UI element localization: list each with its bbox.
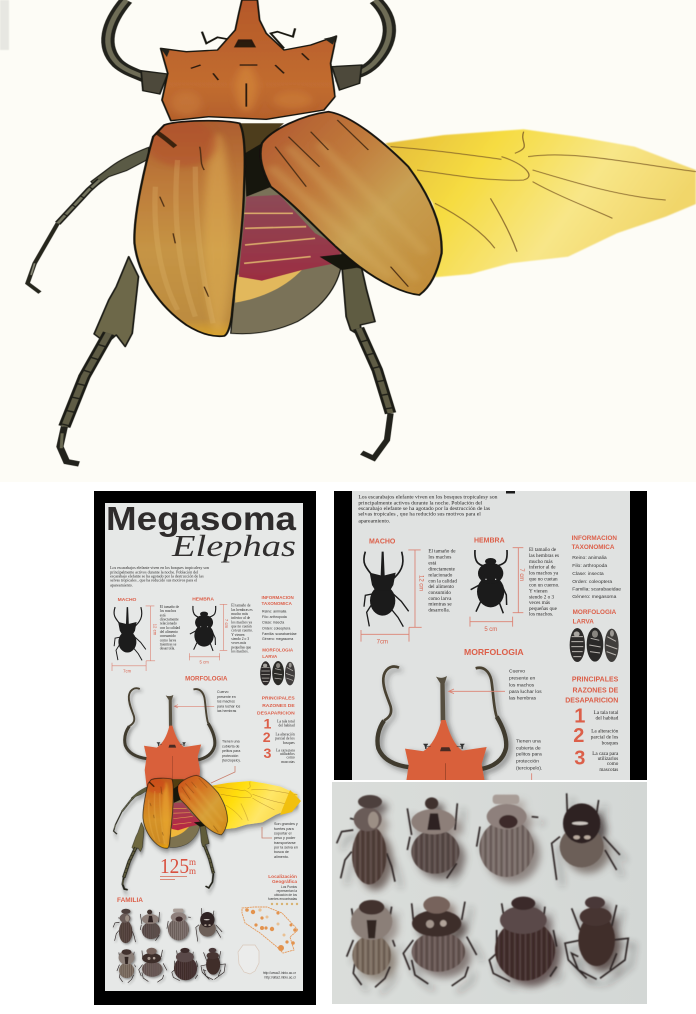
male section: como larva [160,638,177,642]
male section: del alimento [428,584,454,590]
larva morphology: LARVA [573,618,594,625]
geographic location: Los Puntos [281,885,297,889]
reasons for disappearance: bosques [602,740,618,746]
beetle head and horns [374,664,515,780]
female section: los machos. [529,612,553,618]
male section: está [160,613,166,617]
intro text: escarabajo elefante se ha agotado por la destrucción de las [110,574,204,579]
reasons for disappearance: parcial de los [591,734,618,740]
intro text: apareamiento. [110,582,133,587]
taxonomy: Orden: coleoptera [262,626,290,630]
morphology heading: MORFOLOGIA [185,675,228,682]
taxonomy: Clase: insecta [572,571,604,577]
male section: desarrolla. [160,647,175,651]
reasons for disappearance: 1 [263,717,271,733]
larva morphology: LARVA [262,654,278,659]
female section: 7 cm [224,619,229,629]
size number 125 mm [160,859,196,880]
female section: inferior al de [231,616,251,620]
female section: pequeñas que [529,606,558,612]
male section: El tamaño de [160,605,179,609]
female section: mucho más [231,612,249,616]
male section: 7cm [377,640,388,646]
illustration: beetle with open wing [28,0,696,464]
poster subtitle: Elephas: Elephas [171,528,296,563]
reasons for disappearance: 3 [574,747,585,769]
male section: 12 cm [417,575,423,591]
reasons for disappearance: como [607,761,619,767]
geographic location [238,874,298,980]
larva morphology: MORFOLOGIA [262,647,294,652]
reasons for disappearance: del habitad [279,723,295,727]
map of Costa Rica [242,907,298,953]
poster title: Megasoma: Megasoma [106,500,297,537]
horn note: para luchar los [217,704,240,708]
male section: con la calidad [428,578,457,584]
female section: 7 cm [518,568,524,581]
wing note: busca de [274,850,289,854]
source links: http://www2.inbio.ac.cr [263,971,297,975]
reasons for disappearance: utilizarlos [280,752,295,756]
reasons for disappearance: RAZONES DE [573,687,619,694]
taxonomy: Orden: coleoptera [572,579,612,585]
female section: que no cuetan [231,625,252,629]
female section: inferior al de [529,564,556,571]
panel: watercolour beetle illustration [0,0,696,482]
female section: que no cuetan [529,577,558,583]
intro text [110,565,209,587]
female section: Y vienen [231,633,245,637]
male section: está [428,561,437,567]
reasons for disappearance: PRINCIPALES [572,677,619,684]
male section: mientras se [160,642,177,646]
horn note: para luchar los [509,689,542,695]
female section: 5 cm [200,659,209,664]
female section: El tamaño de [529,547,557,553]
male section: El tamaño de [428,549,456,555]
taxonomy: TAXONOMICA [262,601,293,606]
horn note: presente en [509,676,536,682]
poster beetle [114,688,301,890]
family heading: FAMILIA [117,897,143,904]
taxonomy: INFORMACION [262,595,294,600]
reasons for disappearance: La caza para [276,748,295,752]
geographic location: Geográfica [272,879,297,885]
female section: con un cuerno. [529,582,559,588]
taxonomy: TAXONOMICA [572,544,615,551]
reasons for disappearance: RAZONES DE [262,703,295,709]
ghost beetle outline [238,945,259,974]
larva morphology [570,609,619,662]
velvet note: (terciopelo). [222,759,241,763]
morphology heading: MORFOLOGIA [464,647,524,657]
taxonomy [572,535,621,600]
larva morphology: MORFOLOGIA [573,609,617,616]
reasons for disappearance: PRINCIPALES [262,695,295,701]
female section: 5 cm [484,627,497,633]
intro text: principalmente activos durante la noche. Población del [110,570,199,575]
source links [263,971,297,980]
velvet note [222,739,241,763]
horn note: los machos [217,700,235,704]
male section: como larva [428,596,452,602]
family beetles small [113,908,225,983]
wing note: por la selva en [274,846,298,850]
intro text: Los escarabajos elefante viven en los bosques tropicalesy son [358,493,498,500]
reasons for disappearance [565,677,619,773]
male section: relacionado [160,622,177,626]
reasons for disappearance: 2 [573,725,584,747]
horn note: los machos [509,682,535,688]
taxonomy: Género: megasoma [262,637,293,641]
female section: veces más [529,600,550,606]
velvet note: protección [222,754,238,758]
velvet note: cubierta de [222,744,240,748]
wing note: peso y poder [274,836,296,840]
larva morphology [260,647,295,685]
geographic location: Localización [268,874,297,880]
size number 125 mm: m [189,857,196,867]
velvet note: (terciopelo). [516,765,542,771]
female section: los machos ya [529,571,559,577]
male section [361,538,457,646]
female section: HEMBRA [192,596,214,602]
geographic location: representan la [277,889,297,893]
male section: desarrolla. [428,608,450,614]
male section: relacionado [428,572,453,578]
reasons for disappearance: 3 [263,746,271,762]
reasons for disappearance: La alteración [276,733,295,737]
reasons for disappearance: utilizarlos [598,756,618,762]
poster upper content [110,565,297,764]
panel: full poster photo [94,491,316,1005]
intro text: selvas tropicales , que ha reducido sus motivos para el [110,578,198,584]
female section: siendo 2 o 3 [231,637,249,641]
female section: mucho más [529,559,553,565]
male section: mientras se [428,602,452,608]
velvet note: Tienen una [516,738,541,744]
male section: consumido [160,634,176,638]
taxonomy: INFORMACION [572,535,617,542]
velvet note [516,738,542,780]
reasons for disappearance: como [287,756,295,760]
male section: directamente [160,617,179,621]
reasons for disappearance: mascotas [599,767,618,773]
eight family beetles [337,793,634,993]
wing note: alimento. [274,855,289,859]
reasons for disappearance: parcial de los [275,737,295,741]
intro text: selvas tropicales , que ha reducido sus motivos para el [358,512,481,518]
size number 125 mm: 125 [160,854,189,878]
horn note: presente en [217,695,236,699]
taxonomy: Clase: insecta [262,621,284,625]
geographic location: ubicación de los [274,893,297,897]
taxonomy: Filo: arthropoda [262,615,287,619]
female section [189,596,253,664]
reasons for disappearance: DESAPARICION [257,710,295,716]
intro text: Los escarabajos elefante viven en los bosques tropicalesy son [110,565,209,570]
panel: enlarged poster upper detail [334,491,647,780]
male section [112,597,180,673]
female section: los machos. [231,650,249,654]
reasons for disappearance: mascotas [281,760,295,764]
reasons for disappearance: La tala total [277,719,295,723]
horn note: las hembras [509,695,537,701]
reasons for disappearance: DESAPARICION [565,698,618,705]
male section: los machos [428,555,451,561]
velvet note: pelitos para [222,749,240,753]
velvet note: pelitos para [516,752,542,758]
reasons for disappearance: 1 [574,706,585,728]
source links: http://atta2.inbio.ac.cr [264,976,297,980]
taxonomy: Reino: animalia [572,555,607,561]
intro text [358,493,498,524]
intro text: apareamiento. [358,518,391,524]
reasons for disappearance: del habitad [596,716,619,722]
female section: HEMBRA [474,537,505,544]
reasons for disappearance: La alteración [591,729,619,735]
male section: 7cm [123,668,132,673]
intro text: escarabajo elefante se ha agotado por la destrucción de las [358,505,490,512]
horn note: Cuervo [217,690,228,694]
male section: 12 cm [152,624,157,636]
taxonomy: Filo: arthropoda [572,563,607,569]
size number 125 mm: m [189,866,196,876]
velvet note: cubierta de [516,745,541,751]
velvet note: Tienen una [222,739,240,743]
taxonomy [262,595,297,641]
horn note [174,690,240,713]
female section: El tamaño de [231,604,251,608]
male section: MACHO [369,538,396,545]
velvet note: protección [516,759,539,765]
male section: del alimento [160,630,178,634]
wing note: Son grandes y [274,822,298,826]
female section: Y vienen [529,588,548,594]
female section: con un cuerno. [231,629,253,633]
taxonomy: Familia: scarabaeidae [572,587,621,593]
horn note: Cuervo [509,669,525,675]
male section: con la calidad [160,626,180,630]
horn note [449,669,542,701]
wing note: fuertes para [274,827,295,831]
female section [470,537,559,633]
female section: veces más [231,641,247,645]
reasons for disappearance: La tala total [594,710,619,716]
wing note: soportar el [274,832,292,836]
male section: MACHO [118,597,137,603]
wing note: transportarse [274,841,296,845]
reasons for disappearance: La caza para [592,751,619,757]
intro text: principalmente activos durante la noche. Población del [358,500,483,506]
female section: las hembras es [231,608,253,612]
female section: siendo 2 o 3 [529,594,554,600]
reasons for disappearance: 2 [263,730,271,746]
female section: las hembras es [529,553,559,559]
taxonomy: Género: megasoma [572,594,617,600]
taxonomy: Familia: scarabaeidae [262,632,297,636]
male section: consumido [428,590,451,596]
taxonomy: Reino: animalia [262,609,286,613]
reasons for disappearance: bosques [283,741,295,745]
male section: directamente [428,566,456,572]
geographic location: fuentes encontradas [268,897,297,901]
horn note: las hembras [217,709,237,713]
reasons for disappearance [257,695,295,764]
female section: pequeñas que [231,646,251,650]
female section: los machos ya [231,620,252,624]
wing note [274,822,298,859]
male section: los machos [160,609,177,613]
panel: family beetles photo [332,782,647,1004]
